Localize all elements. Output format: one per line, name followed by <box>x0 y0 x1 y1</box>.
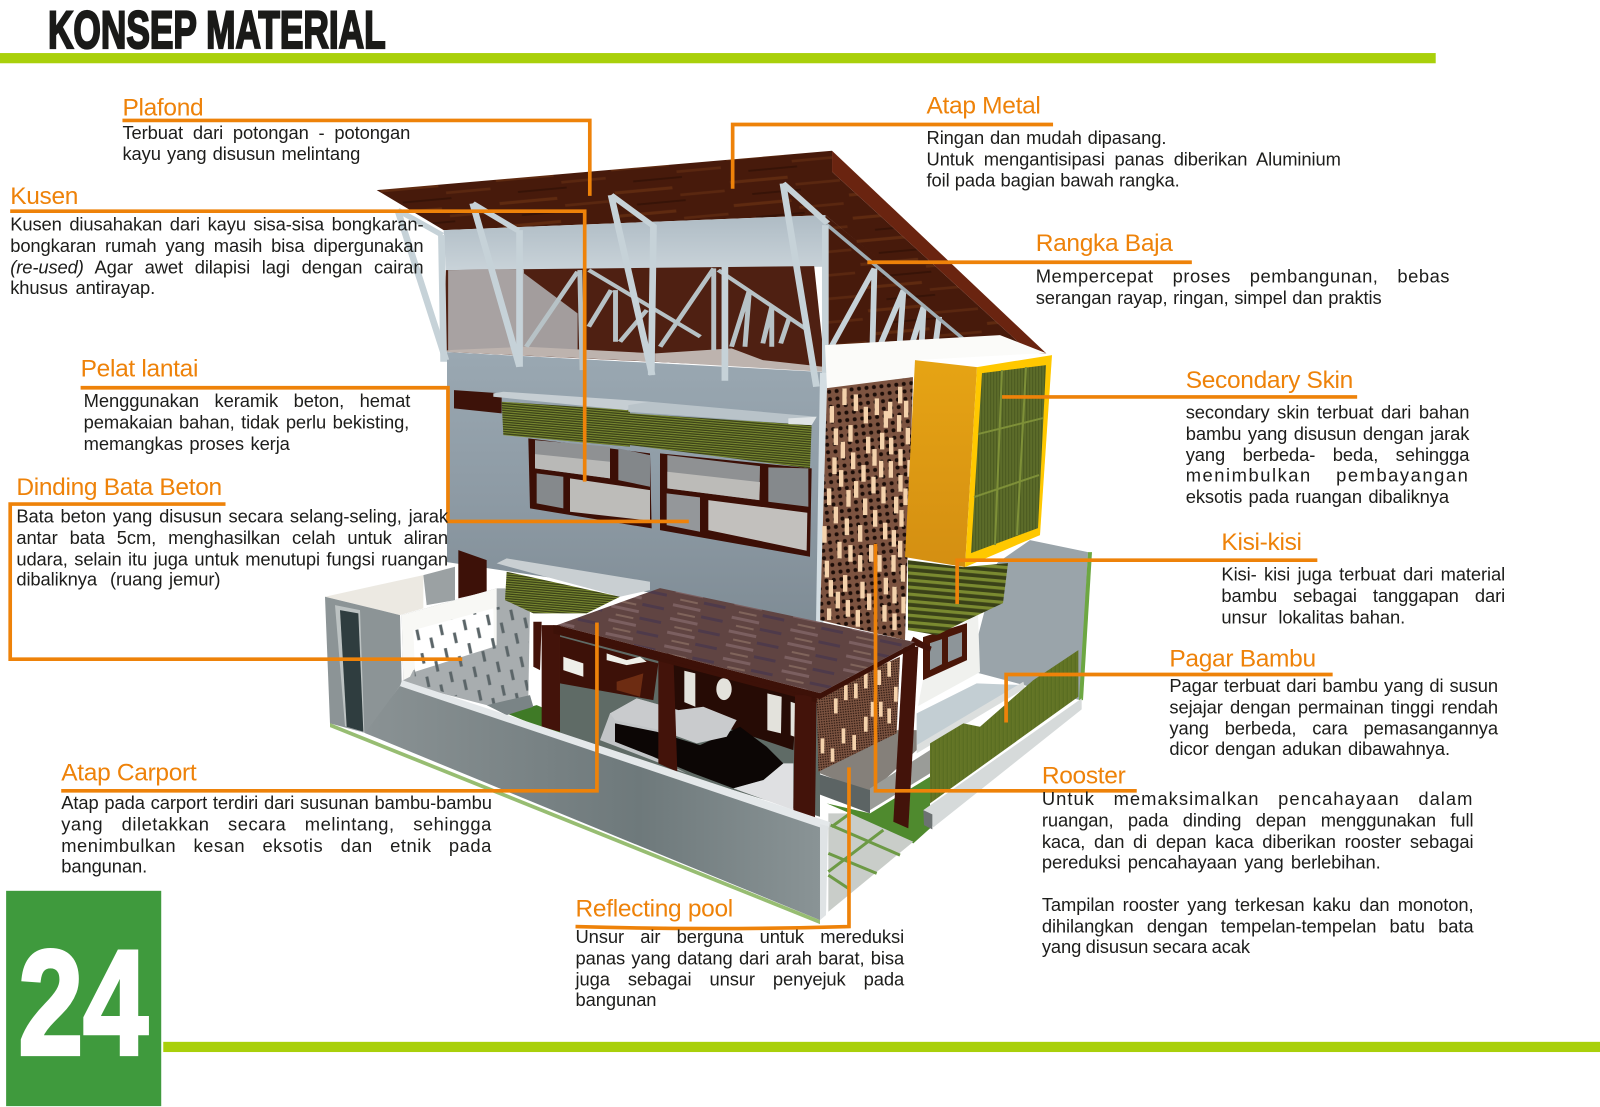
footer bar <box>163 1042 1600 1052</box>
text: Atap Carport: bangunan. <box>61 856 147 877</box>
car <box>600 698 793 810</box>
leader: Dinding Bata Beton <box>10 504 462 659</box>
text: Secondary Skin: bambu yang disusun dengan jarak <box>1186 423 1469 444</box>
beam <box>553 625 820 703</box>
window left <box>528 438 652 528</box>
rooster wall <box>820 377 913 640</box>
left court wall <box>325 550 597 750</box>
text: Reflecting pool: bangunan <box>576 990 656 1010</box>
text: Rooster <box>1042 789 1474 957</box>
kisi-kisi louvre <box>908 560 1008 635</box>
text: Pelat lantai: pemakaian bahan, tidak perlu bekisting, <box>84 412 409 432</box>
carport posts <box>533 622 817 818</box>
text: Pagar Bambu: yang berbeda, cara pemasangannya <box>1169 718 1498 738</box>
text: Atap Carport: yang diletakkan secara melintang, sehingga <box>61 814 492 834</box>
carport and car <box>533 622 820 818</box>
leader: Atap Metal <box>733 124 1053 189</box>
text: Kusen: (re-used) Agar awet dilapisi lagi dengan cairan <box>10 257 423 277</box>
heading: Rooster: Rooster <box>1042 762 1125 790</box>
text: Secondary Skin: yang berbeda- beda, sehingga <box>1186 444 1469 465</box>
main wall <box>447 352 825 650</box>
gable interior <box>825 215 995 363</box>
roof fascia <box>832 151 1046 353</box>
front wall <box>330 680 830 924</box>
paving stones <box>828 813 913 912</box>
text: Reflecting pool: Unsur air berguna untuk mereduksi <box>576 927 904 947</box>
grass court <box>507 705 597 750</box>
back wall <box>560 630 820 817</box>
heading: Kisi-kisi: Kisi-kisi <box>1221 529 1302 556</box>
text: Pagar Bambu: dicor dengan adukan dibawahnya. <box>1169 739 1450 759</box>
heading: Plafond: Plafond <box>122 94 203 121</box>
brown block <box>454 390 502 413</box>
text: Pagar Bambu: sejajar dengan permainan tinggi rendah <box>1169 697 1498 717</box>
text: Plafond: Terbuat dari potongan - potongan <box>122 122 410 143</box>
text: Pelat lantai <box>84 391 410 454</box>
text: Pelat lantai: memangkas proses kerja <box>84 433 290 454</box>
page number: 24 <box>18 919 148 1086</box>
door <box>458 550 487 598</box>
reflecting pool and garden <box>817 650 1082 912</box>
side face <box>325 597 402 733</box>
heading: Rangka Baja: Rangka Baja <box>1036 230 1173 257</box>
text: Secondary Skin: menimbulkan pembayangan <box>1186 466 1469 486</box>
text: Plafond: kayu yang disusun melintang <box>122 144 360 164</box>
leader: Pagar Bambu <box>1006 674 1333 722</box>
heading: Secondary Skin: Secondary Skin <box>1186 366 1353 394</box>
text: Kisi-kisi <box>1221 564 1505 627</box>
text: Secondary Skin <box>1186 402 1470 507</box>
text: Reflecting pool <box>575 927 904 1010</box>
text: Rooster: dihilangkan dengan tempelan-tempelan batu bata <box>1042 916 1473 936</box>
secondary skin box <box>905 355 1052 567</box>
text: Rangka Baja: Mempercepat proses pembangunan, bebas <box>1036 266 1450 287</box>
text: Atap Metal: foil pada bagian bawah rangka. <box>927 170 1180 190</box>
heading: Atap Carport: Atap Carport <box>61 759 196 787</box>
window right <box>660 453 812 557</box>
text: Kusen: Kusen diusahakan dari kayu sisa-sisa bongkaran- <box>10 214 423 235</box>
upper beam wall <box>444 215 825 271</box>
text: Rooster: kaca, dan di depan kaca diberikan rooster sebagai <box>1042 831 1473 852</box>
text: Kusen: bongkaran rumah yang masih bisa dipergunakan <box>10 235 423 256</box>
leader: Kusen <box>10 211 585 482</box>
leader: Pelat lantai <box>81 388 689 521</box>
right side wall <box>918 540 1092 706</box>
leader: Kisi-kisi <box>957 560 1317 604</box>
perforated wall <box>402 588 530 705</box>
text: Dinding Bata Beton: udara, selain itu juga untuk menutupi fungsi ruangan <box>16 548 448 569</box>
post right <box>893 647 918 828</box>
white column and band <box>816 360 915 623</box>
text: Rooster: Untuk memaksimalkan pencahayaan dalam <box>1042 789 1473 809</box>
text: Rooster: Tampilan rooster yang terkesan kaku dan monoton, <box>1042 895 1473 915</box>
heading: Atap Metal: Atap Metal <box>927 92 1041 119</box>
text: Atap Carport: Atap pada carport terdiri dari susunan bambu-bambu <box>61 793 492 813</box>
small awning and louvre <box>497 558 650 613</box>
leader: Atap Carport <box>61 622 597 791</box>
leader: Rangka Baja <box>867 260 1192 264</box>
text: Kisi-kisi: unsur lokalitas bahan. <box>1221 607 1405 627</box>
grey wall behind <box>423 567 455 605</box>
bamboo louvres upper <box>502 402 630 447</box>
text: Atap Carport <box>61 793 492 877</box>
steel truss <box>398 183 973 387</box>
text: Rangka Baja <box>1036 266 1450 308</box>
leader: Rooster <box>876 544 1137 791</box>
header bar <box>0 53 1436 63</box>
text: Secondary Skin: eksotis pada ruangan dibaliknya <box>1186 487 1449 507</box>
leader: Secondary Skin <box>1002 395 1357 399</box>
text: Atap Carport: menimbulkan kesan eksotis dan etnik pada <box>61 835 492 856</box>
awnings <box>493 392 817 425</box>
text: Kusen <box>10 214 423 298</box>
text: Pelat lantai: Menggunakan keramik beton, hemat <box>84 391 410 411</box>
text: Dinding Bata Beton: antar bata 5cm, menghasilkan celah untuk aliran <box>16 527 448 548</box>
text: Dinding Bata Beton: dibaliknya (ruang jemur) <box>16 570 220 590</box>
text: Secondary Skin: secondary skin terbuat dari bahan <box>1186 402 1469 422</box>
text: Pagar Bambu: Pagar terbuat dari bambu yang di susun <box>1169 676 1498 696</box>
heading: Pagar Bambu: Pagar Bambu <box>1169 645 1316 672</box>
text: Kisi-kisi: Kisi- kisi juga terbuat dari material <box>1221 564 1505 585</box>
text: Plafond <box>122 122 410 164</box>
bamboo fence <box>930 650 1078 803</box>
heading: Pelat lantai: Pelat lantai <box>81 355 198 383</box>
lower rooster <box>793 637 932 828</box>
leader: Plafond <box>122 120 590 196</box>
small window side <box>923 623 967 680</box>
title: KONSEP MATERIAL <box>48 1 386 60</box>
text: Pagar Bambu <box>1169 676 1498 759</box>
text: Atap Metal <box>926 128 1341 190</box>
text: Atap Metal: Ringan dan mudah dipasang. <box>927 128 1166 148</box>
text: Kusen: khusus antirayap. <box>10 278 155 298</box>
text: Dinding Bata Beton <box>16 506 448 590</box>
heading: Dinding Bata Beton: Dinding Bata Beton <box>16 473 222 501</box>
roof soffit <box>377 151 1031 355</box>
left bay frame <box>560 637 658 700</box>
clerestory opening <box>444 266 825 372</box>
text: Rooster: ruangan, pada dinding depan menggunakan full <box>1042 810 1473 830</box>
carport roof <box>557 588 915 699</box>
page number panel <box>6 891 161 1106</box>
white band above rooster <box>825 335 1046 388</box>
text: Rooster: pereduksi pencahayaan yang berlebihan. <box>1042 852 1381 873</box>
text: Kisi-kisi: bambu sebagai tanggapan dari <box>1221 585 1505 606</box>
text: Rangka Baja: serangan rayap, ringan, simpel dan praktis <box>1036 287 1382 308</box>
text: Dinding Bata Beton: Bata beton yang disusun secara selang-seling, jarak <box>16 506 448 527</box>
leader: Reflecting pool <box>576 767 849 929</box>
roof and gable <box>377 151 1046 372</box>
text: Reflecting pool: juga sebagai unsur penyejuk pada <box>576 969 904 989</box>
text: Reflecting pool: panas yang datang dari arah barat, bisa <box>576 948 904 968</box>
lawn <box>827 777 930 843</box>
dark bay <box>673 660 797 750</box>
text: Atap Metal: Untuk mengantisipasi panas diberikan Aluminium <box>927 149 1341 169</box>
heading: Kusen: Kusen <box>10 183 78 210</box>
text: Rooster: yang disusun secara acak <box>1042 937 1250 957</box>
heading: Reflecting pool: Reflecting pool <box>576 895 733 922</box>
